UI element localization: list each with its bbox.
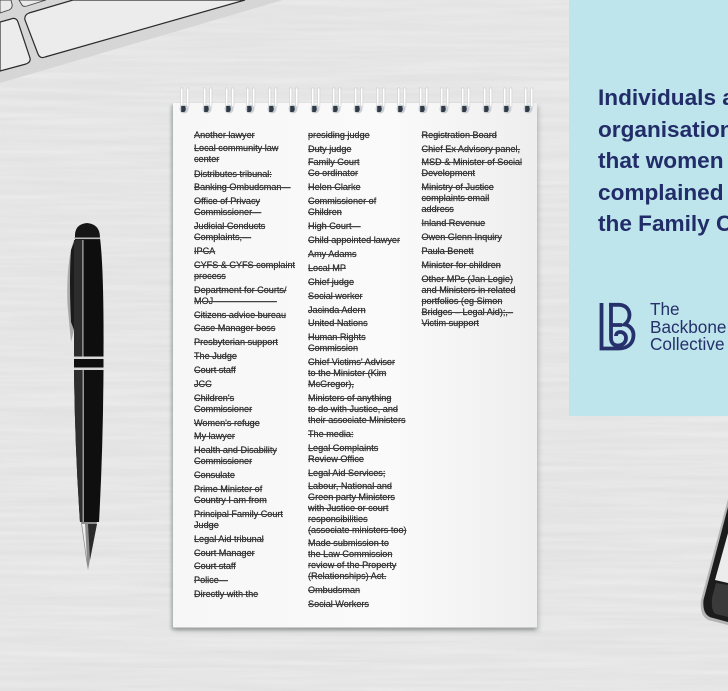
entry: [194, 508, 283, 530]
phone: [700, 500, 728, 625]
entry: Children: [308, 207, 342, 217]
entry: [308, 357, 395, 390]
entry: Chief Ex Advisory panel,: [422, 144, 520, 154]
entry: [422, 274, 516, 328]
keyboard: [0, 0, 282, 83]
entry: United Nations: [308, 318, 368, 328]
entry: [422, 157, 522, 178]
entry: Duty judge: [308, 144, 351, 154]
entry: My lawyer: [194, 431, 235, 441]
entry: (Relationships) Act.: [308, 571, 386, 581]
entry: Country I am from: [194, 494, 267, 504]
entry: Social worker: [308, 290, 363, 300]
entry: [308, 157, 360, 178]
entry: Child appointed lawyer: [308, 234, 400, 244]
entry: Co ordinator: [308, 168, 358, 178]
entry: their associate Ministers: [308, 414, 406, 424]
list column 1: [194, 130, 296, 600]
entry: and Ministers in related: [422, 285, 516, 295]
entry: Commissioner—: [194, 207, 261, 217]
entry: Presbyterian support: [194, 337, 278, 347]
entry: Bridges – Legal Aid);,–: [422, 307, 513, 317]
entry: Department for Courts/: [194, 284, 286, 294]
entry: Women's refuge: [194, 418, 260, 428]
entry: complaints email: [422, 193, 489, 203]
entry: to do with Justice, and: [308, 404, 398, 414]
entry: IPCA: [194, 246, 215, 256]
entry: Children's: [194, 392, 234, 402]
entry: Paula Benett: [422, 246, 474, 256]
entry: High Court—: [308, 220, 361, 230]
entry: to the Minister (Kim: [308, 368, 386, 378]
entry: Case Manager boss: [194, 323, 275, 333]
entry: Health and Disability: [194, 445, 277, 455]
entry: Court staff: [194, 364, 236, 374]
entry: Chief judge: [308, 276, 354, 286]
entry: Court staff: [194, 561, 236, 571]
entry: Labour, National and: [308, 481, 392, 491]
entry: Complaints,—: [194, 232, 251, 242]
entry: Helen Clarke: [308, 182, 361, 192]
entry: Legal Complaints: [308, 442, 378, 452]
panel: title and logo: [569, 0, 728, 416]
entry: Inland Revenue: [422, 218, 485, 228]
entry: Local MP: [308, 262, 346, 272]
entry: (associate ministers too): [308, 525, 407, 535]
entry: [194, 445, 277, 466]
entry: Social Workers: [308, 598, 369, 608]
entry: Police—: [194, 575, 228, 585]
entry: Judge: [194, 520, 219, 530]
entry: Family Court: [308, 157, 360, 167]
list column 3: [422, 130, 522, 328]
logo text: The: [650, 299, 680, 319]
entry: Chief Victims' Advisor: [308, 357, 395, 367]
entry: [308, 332, 366, 353]
entry: the Law Commission: [308, 549, 392, 559]
entry: Ministry of Justice: [422, 182, 494, 192]
entry: Registration Board: [422, 130, 497, 140]
entry: [194, 260, 296, 282]
entry: The media:: [308, 428, 354, 438]
entry: responsibilities: [308, 514, 368, 524]
logo: LB monogram: [600, 302, 636, 350]
entry: address: [422, 204, 454, 214]
heading: that women: [598, 148, 724, 173]
entry: The Judge: [194, 350, 237, 360]
entry: Local community law: [194, 143, 278, 153]
entry: [194, 143, 278, 164]
logo text: [650, 299, 726, 354]
entry: [308, 196, 376, 217]
entry: Court Manager: [194, 548, 255, 558]
entry: Victim support: [422, 318, 479, 328]
entry: Green party Ministers: [308, 492, 395, 502]
list column 2: [308, 130, 407, 608]
entry: review of the Property: [308, 560, 396, 570]
entry: Judicial Conducts: [194, 220, 265, 230]
notebook spiral binding: [180, 88, 534, 114]
entry: Jacinda Adern: [308, 304, 366, 314]
entry: JCC: [194, 378, 212, 388]
heading: [598, 85, 728, 236]
entry: Commissioner: [194, 404, 252, 414]
entry: with Justice or court: [308, 503, 388, 513]
entry: Another lawyer: [194, 130, 255, 140]
notebook: [173, 103, 537, 628]
entry: Minister for children: [422, 260, 501, 270]
entry: Amy Adams: [308, 248, 357, 258]
entry: MOJ———————: [194, 296, 277, 306]
entry: portfolios (eg Simon: [422, 296, 502, 306]
entry: Ministers of anything: [308, 392, 391, 402]
entry: [308, 442, 378, 464]
entry: [194, 220, 266, 242]
entry: Legal Aid Services;: [308, 468, 385, 478]
entry: process: [194, 270, 226, 280]
entry: [422, 182, 494, 214]
entry: Directly with the: [194, 589, 258, 599]
entry: Other MPs (Jan Logie): [422, 274, 513, 284]
entry: [308, 392, 406, 424]
entry: Human Rights: [308, 332, 366, 342]
entry: Office of Privacy: [194, 196, 260, 206]
entry: Prime Minister of: [194, 484, 262, 494]
entry: Consulate: [194, 470, 235, 480]
entry: Distributes tribunal:: [194, 168, 272, 178]
pen: [67, 223, 104, 570]
entry: [194, 392, 252, 414]
entry: [194, 284, 287, 306]
entry: Citizens advice bureau: [194, 310, 286, 320]
logo text: Collective: [650, 334, 725, 354]
entry: [308, 538, 396, 582]
entry: Development: [422, 168, 475, 178]
entry: McGregor),: [308, 379, 354, 389]
entry: CYFS & CYFS complaint: [194, 260, 295, 270]
entry: Legal Aid tribunal: [194, 534, 264, 544]
logo text: Backbone: [650, 316, 726, 336]
entry: Commission: [308, 343, 358, 353]
entry: MSD & Minister of Social: [422, 157, 522, 167]
entry: Review Office: [308, 454, 364, 464]
entry: [194, 196, 262, 217]
entry: [308, 481, 407, 536]
entry: Banking Ombudsman—: [194, 182, 291, 192]
entry: Commissioner: [194, 456, 252, 466]
entry: Owen Glenn Inquiry: [422, 232, 502, 242]
entry: Commissioner of: [308, 196, 376, 206]
entry: Made submission to: [308, 538, 389, 548]
entry: Principal Family Court: [194, 508, 283, 518]
entry: center: [194, 154, 219, 164]
entry: Ombudsman: [308, 584, 360, 594]
entry: [194, 484, 267, 506]
entry: presiding judge: [308, 130, 370, 140]
